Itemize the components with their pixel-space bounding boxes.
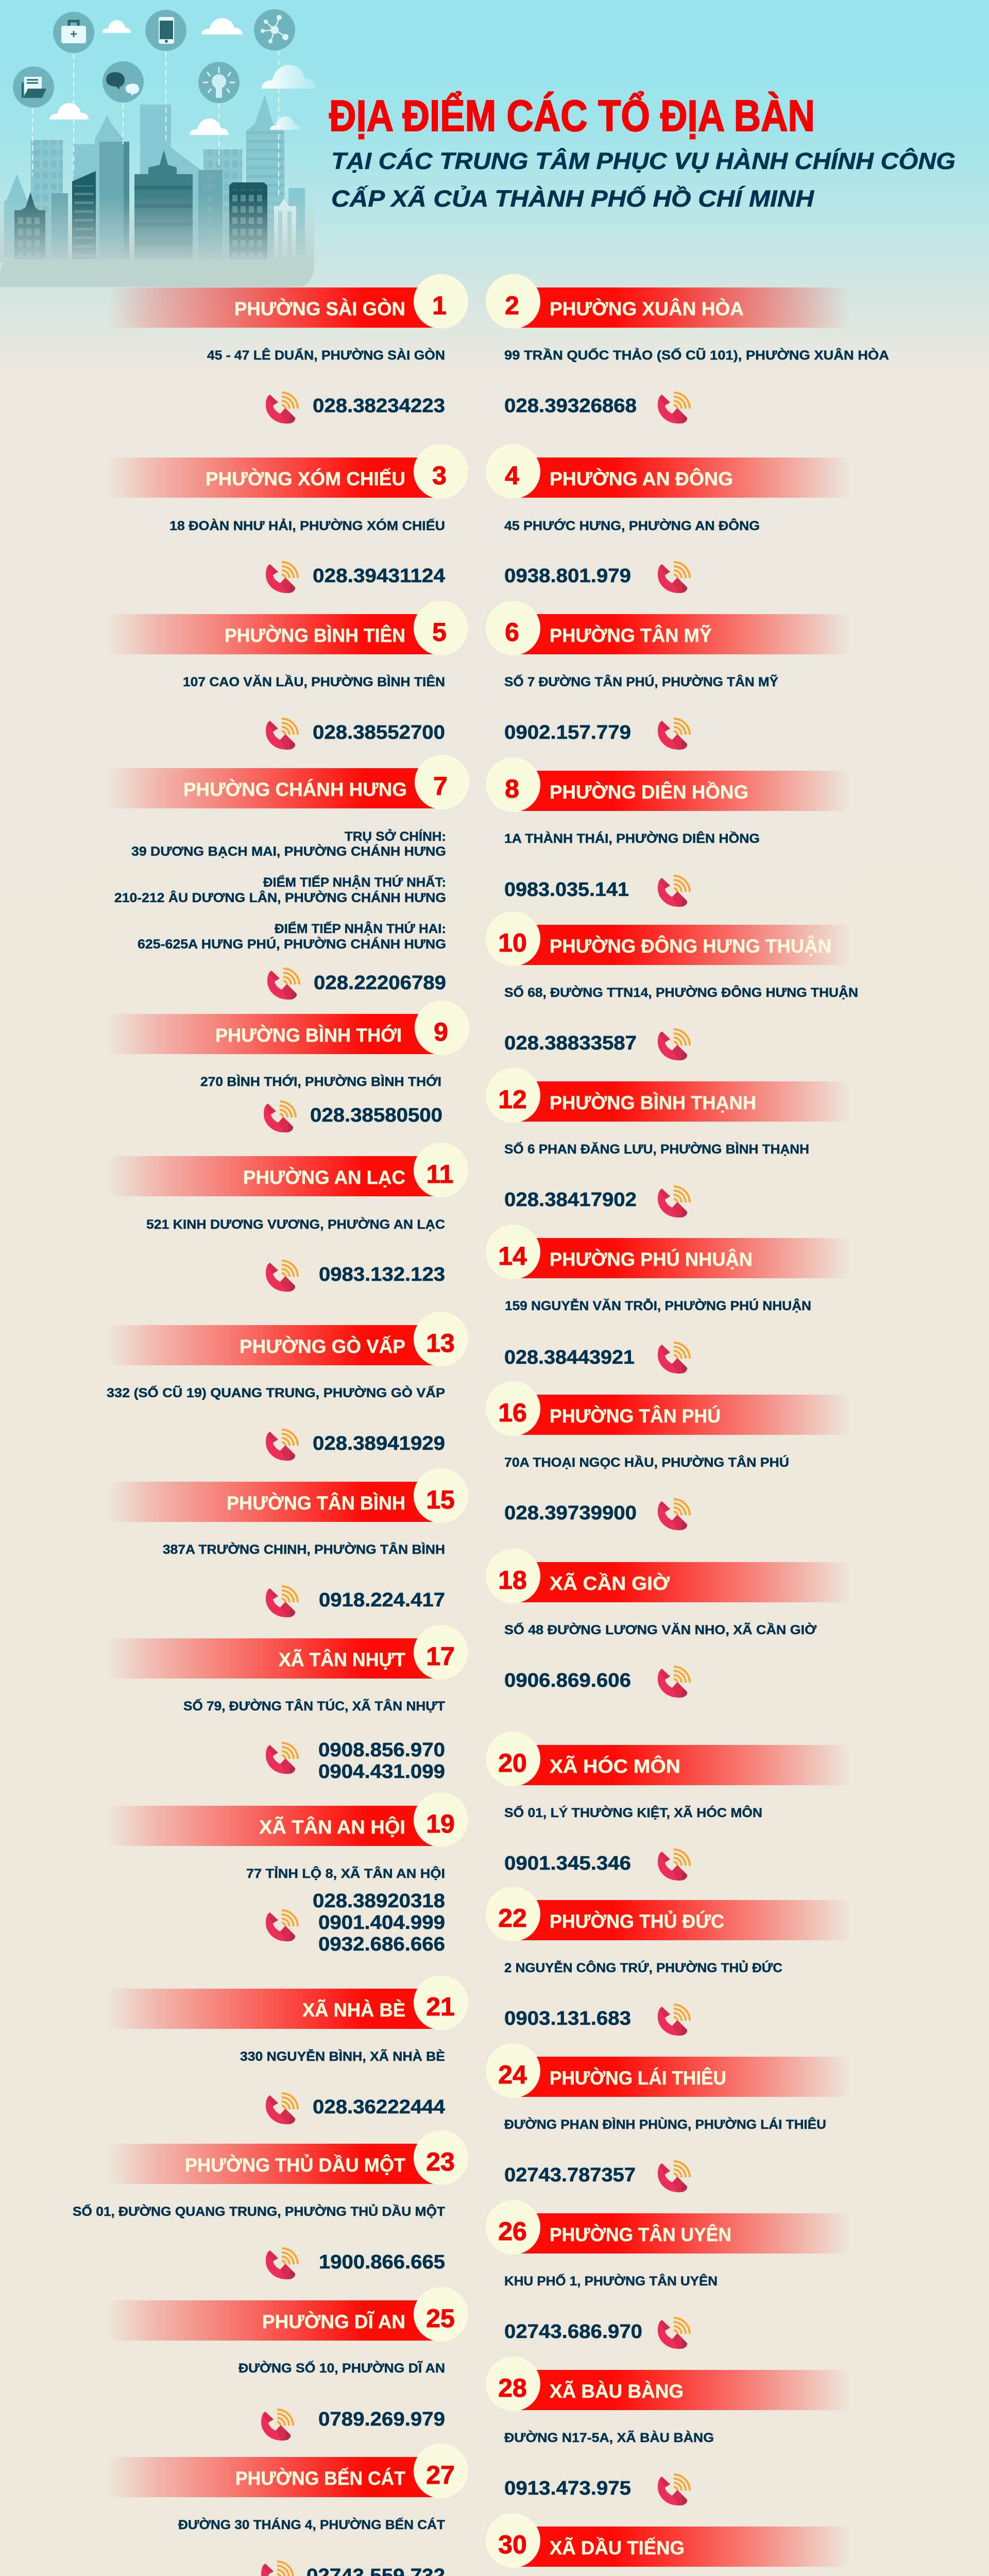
number: 7 xyxy=(433,772,448,801)
address: 1A THÀNH THÁI, PHƯỜNG DIÊN HỒNG xyxy=(504,831,760,846)
number badge xyxy=(486,1887,540,1941)
phone 2: 0901.404.999 xyxy=(318,1912,445,1934)
banner xyxy=(515,925,850,965)
number: 30 xyxy=(498,2530,527,2559)
panel: 17 Xã Tân Nhựt xyxy=(108,1625,468,1783)
icon: phone xyxy=(658,876,690,907)
icon: phone xyxy=(266,1910,298,1941)
number: 10 xyxy=(498,928,527,957)
banner xyxy=(515,2213,850,2253)
banner xyxy=(108,1638,443,1679)
phone: 02743.686.970 xyxy=(504,2321,642,2343)
number badge xyxy=(486,1225,540,1279)
background buildings xyxy=(4,95,305,264)
phone: 028.38443921 xyxy=(504,1347,635,1368)
address: 18 ĐOÀN NHƯ HẢI, PHƯỜNG XÓM CHIẾU xyxy=(169,518,445,533)
banner xyxy=(108,768,444,808)
address: first point line 2: 210-212 ÂU DƯƠNG LÂN, PHƯỜNG CHÁNH HƯNG xyxy=(114,890,446,905)
banner xyxy=(108,287,443,328)
address: 45 PHƯỚC HƯNG, PHƯỜNG AN ĐÔNG xyxy=(504,518,760,533)
address: 107 CAO VĂN LẦU, PHƯỜNG BÌNH TIÊN xyxy=(183,674,445,689)
icon: phone xyxy=(658,2475,690,2505)
icon: phone xyxy=(266,1586,298,1617)
number badge xyxy=(486,2200,540,2255)
banner xyxy=(108,1482,443,1522)
icon: phone xyxy=(264,1101,296,1132)
number badge xyxy=(414,1468,468,1523)
number: 11 xyxy=(427,1160,453,1189)
panel: 27 Phường Bến Cát xyxy=(108,2444,468,2576)
panel: 12 Phường Bình Thạnh xyxy=(486,1068,850,1217)
address: 99 TRẦN QUỐC THẢO (SỐ CŨ 101), PHƯỜNG XUÂN HÒA xyxy=(504,347,889,363)
banner xyxy=(515,1081,850,1122)
phone: 0913.473.975 xyxy=(504,2478,631,2499)
panel: 19 Xã Tân An Hội xyxy=(108,1792,468,1955)
number: 2 xyxy=(505,291,519,320)
number badge xyxy=(414,2444,468,2498)
address: 45 - 47 LÊ DUẨN, PHƯỜNG SÀI GÒN xyxy=(207,347,445,363)
address: ĐƯỜNG SỐ 10, PHƯỜNG DĨ AN xyxy=(238,2360,445,2376)
panel: 21 Xã Nhà Bè xyxy=(108,1975,468,2124)
number: 24 xyxy=(498,2060,527,2089)
number: 14 xyxy=(498,1242,527,1270)
number badge xyxy=(486,1381,540,1436)
panel: 20 Xã Hóc Môn xyxy=(486,1732,850,1880)
icon: phone xyxy=(658,1187,690,1217)
icon: network xyxy=(254,9,295,50)
number badge xyxy=(414,444,468,499)
address: 521 KINH DƯƠNG VƯƠNG, PHƯỜNG AN LẠC xyxy=(146,1216,445,1232)
phone: 028.39431124 xyxy=(313,565,445,587)
number badge xyxy=(486,1732,540,1786)
phone 3: 0932.686.666 xyxy=(318,1934,445,1955)
number: 15 xyxy=(426,1485,455,1514)
phone: 028.38234223 xyxy=(313,395,445,417)
number badge xyxy=(414,1312,468,1366)
banner xyxy=(108,1806,443,1846)
number badge xyxy=(486,274,540,329)
address: KHU PHỐ 1, PHƯỜNG TÂN UYÊN xyxy=(504,2273,718,2289)
number badge xyxy=(414,1143,468,1197)
banner xyxy=(108,2300,443,2341)
banner xyxy=(515,2057,850,2097)
icon: phone xyxy=(658,2318,690,2349)
number badge xyxy=(486,601,540,655)
ground fade xyxy=(0,196,314,263)
title line 2: TẠI CÁC TRUNG TÂM PHỤC VỤ HÀNH CHÍNH CÔNG xyxy=(331,148,956,174)
name: PHƯỜNG CHÁNH HƯNG xyxy=(183,778,407,800)
number: 9 xyxy=(434,1018,448,1046)
panel: 25 Phường Dĩ An xyxy=(108,2287,468,2441)
number badge xyxy=(414,2130,468,2185)
number: 6 xyxy=(505,618,519,647)
name: PHƯỜNG XÓM CHIẾU xyxy=(206,468,405,489)
icon: phone xyxy=(658,1029,690,1060)
number: 12 xyxy=(498,1085,527,1114)
number: 4 xyxy=(505,461,519,490)
icon: smartphone xyxy=(145,10,186,51)
address: 330 NGUYỄN BÌNH, XÃ NHÀ BÈ xyxy=(240,2048,445,2064)
banner xyxy=(515,457,850,498)
panel: 7 Phường Chánh Hưng xyxy=(108,755,469,999)
banner xyxy=(108,1989,443,2029)
icon: briefcase xyxy=(53,12,94,53)
name: PHƯỜNG SÀI GÒN xyxy=(234,298,405,319)
number badge xyxy=(414,601,468,655)
panel: 18 Xã Cần Giờ xyxy=(486,1549,850,1698)
phone: 028.38417902 xyxy=(504,1189,637,1211)
address: second point: ĐIỂM TIẾP NHẬN THỨ HAI: xyxy=(275,921,446,936)
address block xyxy=(114,828,446,952)
phone: 0983.132.123 xyxy=(319,1264,445,1285)
banner xyxy=(108,457,443,498)
name: XÃ TÂN NHỰT xyxy=(279,1649,405,1670)
address: head office line 2: 39 DƯƠNG BẠCH MAI, PHƯỜNG CHÁNH HƯNG xyxy=(131,843,446,859)
icon: phone xyxy=(266,562,298,593)
number: 20 xyxy=(498,1749,527,1777)
phone: 0938.801.979 xyxy=(504,565,631,587)
banner xyxy=(515,287,850,328)
banner xyxy=(106,1014,443,1054)
phone 1: 0908.856.970 xyxy=(318,1739,445,1761)
name: PHƯỜNG THỦ ĐỨC xyxy=(550,1910,724,1932)
name: PHƯỜNG BÌNH THỚI xyxy=(215,1024,402,1046)
icon: phone xyxy=(658,393,690,423)
number badge xyxy=(486,911,540,966)
phone: 0902.157.779 xyxy=(504,722,631,743)
address: second point line 2: 625-625A HƯNG PHÚ, PHƯỜNG CHÁNH HƯNG xyxy=(138,936,446,952)
icon: phone xyxy=(266,1261,298,1292)
number: 23 xyxy=(426,2147,455,2176)
icon: chat bubbles xyxy=(103,61,144,103)
number: 28 xyxy=(498,2374,527,2402)
icon: phone xyxy=(266,2248,298,2279)
number: 8 xyxy=(505,774,519,803)
panel: 15 Phường Tân Bình xyxy=(108,1468,468,1617)
panel: 6 Phường Tân Mỹ xyxy=(486,601,850,750)
icon: folder document xyxy=(13,66,54,108)
phone: 02743.787357 xyxy=(504,2164,636,2186)
dashed connector lines xyxy=(32,50,279,198)
number: 25 xyxy=(426,2304,455,2333)
icon: phone xyxy=(266,1430,298,1461)
icon: phone xyxy=(267,969,299,999)
name: PHƯỜNG TÂN BÌNH xyxy=(227,1492,405,1514)
phone: 028.22206789 xyxy=(314,972,446,994)
panel: 23 Phường Thủ Dầu Một xyxy=(73,2130,468,2279)
icon: phone xyxy=(266,2093,298,2124)
phone: 028.38580500 xyxy=(310,1105,442,1126)
number badge xyxy=(486,444,540,499)
number badge xyxy=(486,2357,540,2411)
icon: phone xyxy=(658,1343,690,1374)
name: PHƯỜNG TÂN MỸ xyxy=(550,624,712,646)
number badge xyxy=(414,1975,468,2030)
address: head office: TRỤ SỞ CHÍNH: xyxy=(345,828,446,844)
address: SỐ 48 ĐƯỜNG LƯƠNG VĂN NHO, XÃ CẦN GIỜ xyxy=(504,1622,817,1637)
name: PHƯỜNG BẾN CÁT xyxy=(235,2467,405,2489)
number badge xyxy=(486,1549,540,1603)
title line 1: ĐỊA ĐIỂM CÁC TỔ ĐỊA BÀN xyxy=(329,91,815,141)
number badge xyxy=(486,757,540,812)
panel: 14 Phường Phú Nhuận xyxy=(486,1225,850,1374)
address: SỐ 68, ĐƯỜNG TTN14, PHƯỜNG ĐÔNG HƯNG THUẬN xyxy=(504,985,858,1000)
panel: 5 Phường Bình Tiên xyxy=(108,601,468,750)
number badge xyxy=(415,755,469,809)
name: XÃ CẦN GIỜ xyxy=(550,1572,670,1594)
icon: phone xyxy=(658,719,690,750)
address: 159 NGUYỄN VĂN TRỖI, PHƯỜNG PHÚ NHUẬN xyxy=(505,1298,811,1313)
name: XÃ HÓC MÔN xyxy=(550,1755,680,1777)
title xyxy=(329,91,956,212)
phone: 0903.131.683 xyxy=(504,2008,631,2029)
banner xyxy=(515,1395,850,1435)
banner xyxy=(515,2527,850,2567)
banner xyxy=(108,614,443,654)
address: SỐ 7 ĐƯỜNG TÂN PHÚ, PHƯỜNG TÂN MỸ xyxy=(504,674,778,689)
number: 22 xyxy=(498,1904,527,1933)
number: 13 xyxy=(426,1329,455,1358)
phone: 0983.035.141 xyxy=(504,879,629,901)
address: ĐƯỜNG N17-5A, XÃ BÀU BÀNG xyxy=(504,2430,714,2445)
address: SỐ 01, LÝ THƯỜNG KIỆT, XÃ HÓC MÔN xyxy=(504,1805,762,1820)
banner xyxy=(108,1156,443,1196)
banner xyxy=(515,2370,850,2410)
phone: 028.38552700 xyxy=(313,722,445,743)
middle buildings xyxy=(52,142,223,273)
name: XÃ DẦU TIẾNG xyxy=(550,2537,685,2558)
icon: phone xyxy=(658,1667,690,1698)
panel: 2 Phường Xuân Hòa xyxy=(486,274,889,423)
icon: phone xyxy=(261,2562,293,2576)
banner xyxy=(515,1238,850,1278)
name: PHƯỜNG TÂN PHÚ xyxy=(550,1405,721,1427)
banner xyxy=(108,1325,443,1365)
phone 2: 0904.431.099 xyxy=(318,1761,445,1783)
icon: phone xyxy=(261,2410,293,2441)
icon: phone xyxy=(658,2005,690,2036)
number: 16 xyxy=(498,1398,527,1427)
name: PHƯỜNG PHÚ NHUẬN xyxy=(550,1248,753,1270)
phone 1: 028.38920318 xyxy=(313,1890,445,1912)
name: PHƯỜNG ĐÔNG HƯNG THUẬN xyxy=(550,935,831,957)
address: SỐ 6 PHAN ĐĂNG LƯU, PHƯỜNG BÌNH THẠNH xyxy=(504,1141,809,1157)
address: 2 NGUYỄN CÔNG TRỨ, PHƯỜNG THỦ ĐỨC xyxy=(504,1960,782,1975)
banner xyxy=(108,2144,443,2184)
address: first point: ĐIỂM TIẾP NHẬN THỨ NHẤT: xyxy=(263,874,446,890)
number: 19 xyxy=(426,1809,455,1838)
number: 18 xyxy=(498,1566,527,1595)
address: 387A TRƯỜNG CHINH, PHƯỜNG TÂN BÌNH xyxy=(163,1541,445,1557)
phone: 028.39326868 xyxy=(504,395,637,417)
number badge xyxy=(415,1001,469,1055)
panel: 8 Phường Diên Hồng xyxy=(486,757,850,907)
number badge xyxy=(486,1068,540,1123)
panel: 30 Xã Dầu Tiếng xyxy=(486,2513,850,2576)
panel: 1 Phường Sài Gòn xyxy=(108,274,468,423)
phone: 0918.224.417 xyxy=(319,1589,445,1611)
name: XÃ BÀU BÀNG xyxy=(550,2380,684,2402)
phone: 1900.866.665 xyxy=(319,2251,445,2273)
phone: 028.36222444 xyxy=(313,2096,445,2118)
banner xyxy=(108,2457,443,2497)
icon: phone xyxy=(266,1743,298,1774)
name: PHƯỜNG AN LẠC xyxy=(243,1166,405,1188)
illustration: smart city header xyxy=(0,9,316,287)
number: 5 xyxy=(432,618,447,647)
icon: phone xyxy=(658,2161,690,2192)
panel: 28 Xã Bàu Bàng xyxy=(486,2357,850,2505)
number: 21 xyxy=(426,1992,455,2021)
number: 27 xyxy=(426,2461,455,2489)
name: PHƯỜNG BÌNH THẠNH xyxy=(550,1092,756,1113)
address: ĐƯỜNG PHAN ĐÌNH PHÙNG, PHƯỜNG LÁI THIÊU xyxy=(504,2116,826,2132)
number badge xyxy=(414,2287,468,2342)
icon: phone xyxy=(266,719,298,750)
panel: 13 Phường Gò Vấp xyxy=(107,1312,468,1461)
name: PHƯỜNG LÁI THIÊU xyxy=(550,2067,726,2089)
banner xyxy=(515,1900,850,1940)
phone numbers xyxy=(313,1890,445,1955)
panel: 22 Phường Thủ Đức xyxy=(486,1887,850,2036)
address: ĐƯỜNG 30 THÁNG 4, PHƯỜNG BẾN CÁT xyxy=(178,2517,445,2532)
panel: 4 Phường An Đông xyxy=(486,444,850,593)
name: PHƯỜNG XUÂN HÒA xyxy=(550,298,744,319)
name: PHƯỜNG TÂN UYÊN xyxy=(550,2224,731,2245)
number badge xyxy=(414,1625,468,1680)
name: XÃ TÂN AN HỘI xyxy=(259,1816,405,1838)
name: XÃ NHÀ BÈ xyxy=(302,1999,405,2021)
panel: 3 Phường Xóm Chiếu xyxy=(108,444,468,593)
panel: 11 Phường An Lạc xyxy=(108,1143,468,1292)
name: PHƯỜNG GÒ VẤP xyxy=(240,1335,405,1357)
number: 3 xyxy=(432,461,447,490)
number: 1 xyxy=(432,291,447,320)
number badge xyxy=(486,2043,540,2098)
panel: 26 Phường Tân Uyên xyxy=(486,2200,850,2349)
banner xyxy=(515,1745,850,1785)
number: 17 xyxy=(426,1642,455,1671)
address: SỐ 79, ĐƯỜNG TÂN TÚC, XÃ TÂN NHỰT xyxy=(183,1698,445,1714)
panel: 16 Phường Tân Phú xyxy=(486,1381,850,1530)
address: SỐ 01, ĐƯỜNG QUANG TRUNG, PHƯỜNG THỦ DẦU MỘT xyxy=(73,2204,445,2219)
address: 270 BÌNH THỚI, PHƯỜNG BÌNH THỚI xyxy=(200,1074,441,1089)
icon: phone xyxy=(658,562,690,593)
name: PHƯỜNG AN ĐÔNG xyxy=(550,468,733,489)
phone: 028.39739900 xyxy=(504,1502,637,1524)
title line 3: CẤP XÃ CỦA THÀNH PHỐ HỒ CHÍ MINH xyxy=(331,185,815,212)
icon: phone xyxy=(266,393,298,423)
phone: 0901.345.346 xyxy=(504,1853,631,1874)
banner xyxy=(515,771,850,811)
icon: phone xyxy=(658,1499,690,1530)
front buildings xyxy=(72,171,96,272)
icon: phone xyxy=(658,1850,690,1880)
panel: 10 Phường Đông Hưng Thuận xyxy=(486,911,858,1060)
banner xyxy=(515,1562,850,1602)
banner xyxy=(515,614,850,654)
number: 26 xyxy=(498,2217,527,2246)
address: 70A THOẠI NGỌC HẦU, PHƯỜNG TÂN PHÚ xyxy=(504,1454,789,1470)
panel: 9 Phường Bình Thới xyxy=(106,1001,469,1132)
address: 77 TỈNH LỘ 8, XÃ TÂN AN HỘI xyxy=(246,1866,445,1881)
phone: 0906.869.606 xyxy=(504,1670,631,1691)
number badge xyxy=(414,274,468,329)
name: PHƯỜNG DIÊN HỒNG xyxy=(550,781,748,803)
phone numbers xyxy=(318,1739,445,1783)
icon: light bulb xyxy=(198,62,240,103)
address: 332 (SỐ CŨ 19) QUANG TRUNG, PHƯỜNG GÒ VẤP xyxy=(107,1385,445,1400)
number badge xyxy=(414,1792,468,1847)
phone: 0789.269.979 xyxy=(318,2409,445,2430)
panel: 24 Phường Lái Thiêu xyxy=(486,2043,850,2192)
clouds xyxy=(49,18,316,135)
phone: 028.38941929 xyxy=(313,1433,445,1454)
name: PHƯỜNG THỦ DẦU MỘT xyxy=(185,2154,405,2176)
name: PHƯỜNG DĨ AN xyxy=(262,2311,405,2332)
number badge xyxy=(486,2513,540,2568)
phone: 028.38833587 xyxy=(504,1032,637,1054)
name: PHƯỜNG BÌNH TIÊN xyxy=(225,624,405,646)
